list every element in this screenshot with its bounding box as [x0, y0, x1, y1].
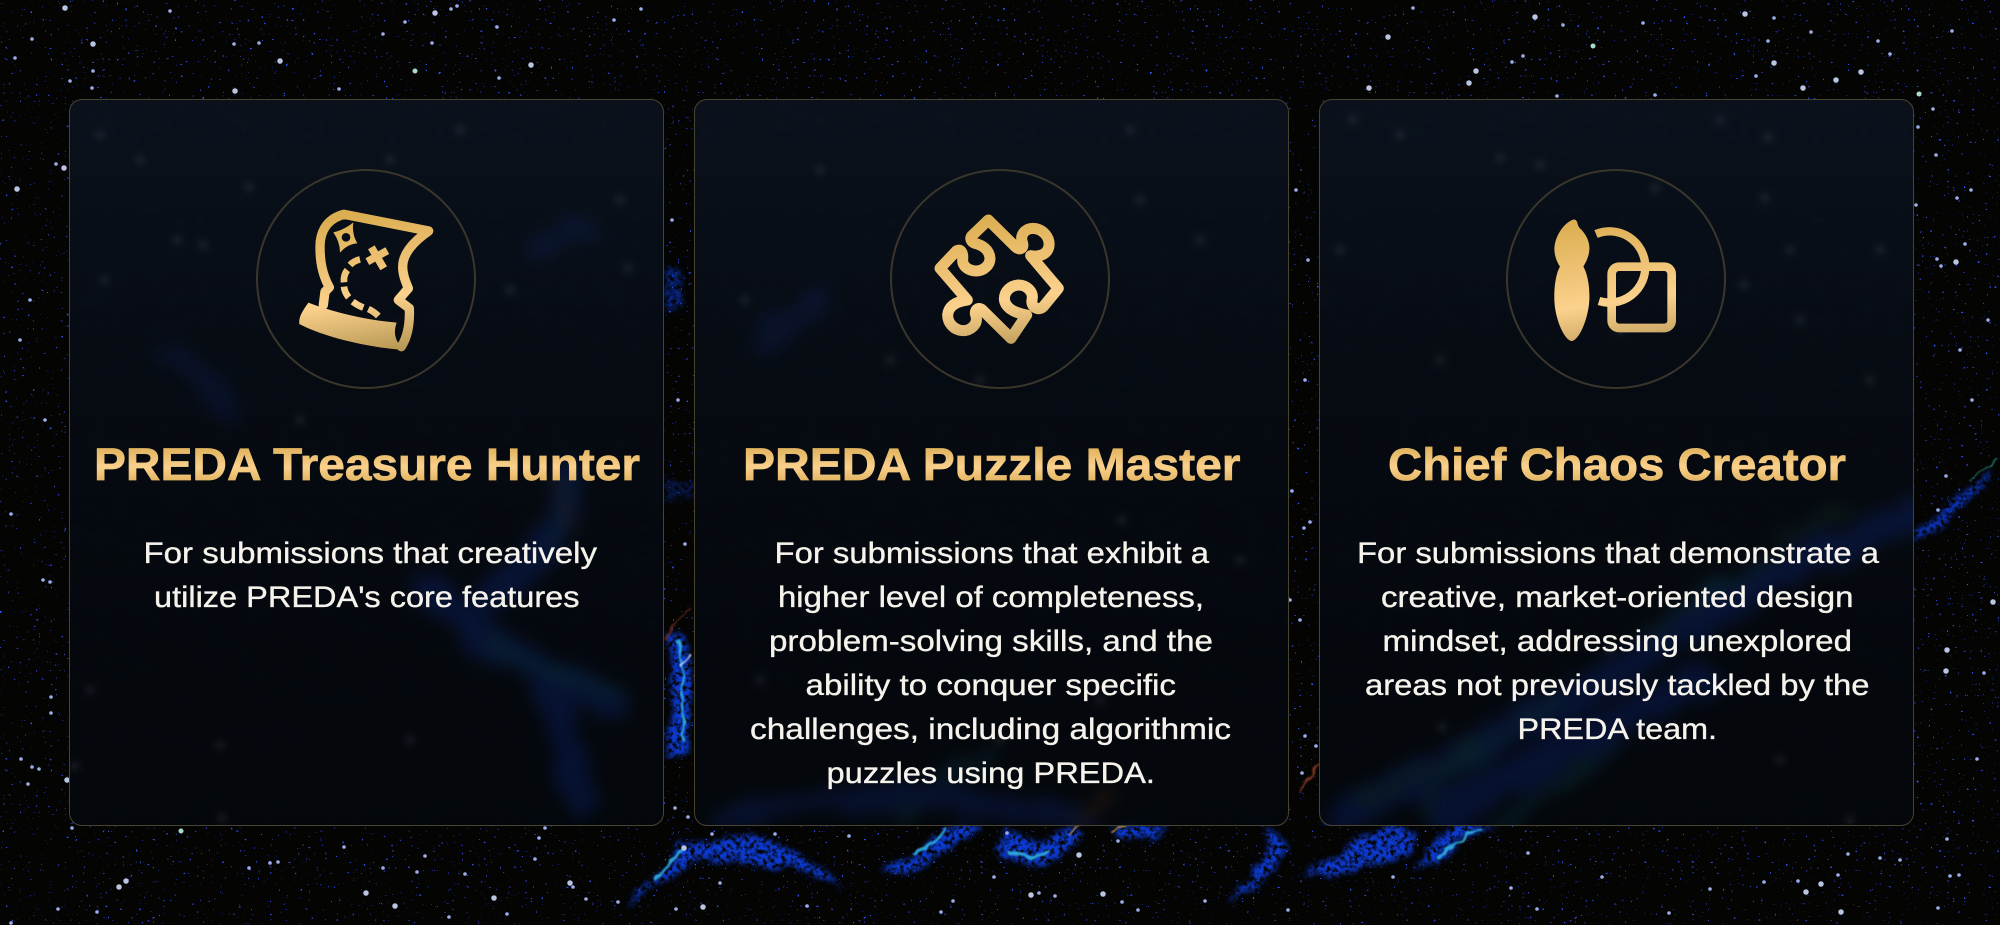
icon: puzzle piece in circle: [891, 170, 1109, 388]
description: problem-solving skills, and the: [769, 625, 1213, 658]
description: utilize PREDA's core features: [154, 581, 580, 614]
description: creative, market-oriented design: [1381, 581, 1854, 614]
icon: treasure map in circle: [257, 170, 475, 388]
panel: Chief Chaos Creator: [1319, 99, 1914, 826]
description: mindset, addressing unexplored: [1382, 625, 1852, 658]
green-tinted stars: [181, 46, 1919, 831]
under-card soft nebula: [170, 231, 1915, 825]
panel: PREDA Treasure Hunter: [69, 99, 664, 826]
description: [750, 537, 1231, 790]
description: PREDA team.: [1518, 713, 1717, 746]
description: puzzles using PREDA.: [826, 757, 1155, 790]
heading: PREDA Treasure Hunter: [94, 439, 640, 490]
description: higher level of completeness,: [778, 581, 1204, 614]
heading: PREDA Puzzle Master: [743, 439, 1240, 490]
description: For submissions that exhibit a: [774, 537, 1209, 570]
bottom nebula wisps: [627, 268, 1994, 905]
panel: PREDA Puzzle Master: [694, 99, 1289, 826]
description: ability to conquer specific: [806, 669, 1176, 702]
faint stars behind glass cards: [75, 119, 1880, 820]
description: areas not previously tackled by the: [1365, 669, 1870, 702]
description: For submissions that demonstrate a: [1357, 537, 1879, 570]
description: [1357, 537, 1879, 746]
heading: Chief Chaos Creator: [1388, 439, 1846, 490]
description: challenges, including algorithmic: [750, 713, 1231, 746]
description: For submissions that creatively: [144, 537, 597, 570]
icon: paintbrush and shapes in circle: [1507, 170, 1725, 388]
description: [144, 537, 597, 614]
